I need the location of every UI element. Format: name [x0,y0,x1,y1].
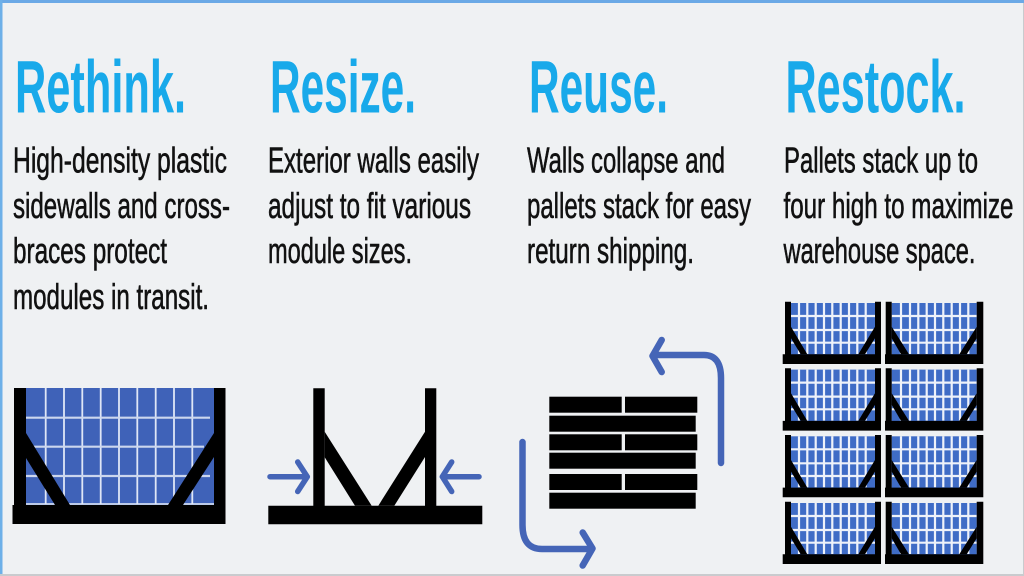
text block: Rethink description: modules in transit. [13,276,209,317]
heading: Resize: Resize. [270,46,416,128]
text block: Rethink description: sidewalls and cross- [13,185,230,226]
text block: Resize description [268,140,479,271]
pallet row 3 left [783,435,881,497]
text block: Rethink description: braces protect [13,230,167,271]
pallet row 4 left [783,502,881,564]
arrow: inward from right [442,462,479,492]
arrow: return path upper [652,340,721,463]
arrow: inward from left [270,462,307,492]
bottom border [0,574,1024,576]
text block: Reuse description: Walls collapse and [527,140,725,180]
text block: Rethink description: High-density plastic [13,140,227,180]
column: Restock [783,46,1014,564]
text block: Resize description: adjust to fit various [268,185,471,226]
icon: adjustable pallet wall frame [268,388,482,524]
heading: Reuse: Reuse. [529,46,668,128]
pallet row 1 left [783,302,881,364]
text block: Resize description: Exterior walls easily [268,140,479,180]
top border [0,0,1024,3]
pallet row 2 right [885,368,983,431]
column: Reuse [522,46,751,566]
pallet row 1 right [885,302,983,364]
text block: Restock description [783,140,1014,271]
text block: Reuse description: return shipping. [527,230,694,271]
column: Rethink [12,46,230,524]
pallet row 3 right [885,435,983,497]
pallet row 4 right [885,502,983,564]
icon: stack of collapsed pallets [549,397,697,509]
pallet row 2 left [783,368,881,431]
arrow: return path lower [522,442,592,566]
right border [1023,3,1024,576]
left border [0,0,2,576]
text block: Reuse description [527,140,751,271]
text block: Resize description: module sizes. [268,230,412,271]
text block: Rethink description [13,140,230,317]
heading: Rethink: Rethink. [15,46,186,128]
column: Resize [268,46,482,524]
icon: pallets stacked four high [783,302,983,564]
text block: Reuse description: pallets stack for easy [527,185,751,226]
icon: solar module in pallet with cross-braces [12,388,226,524]
